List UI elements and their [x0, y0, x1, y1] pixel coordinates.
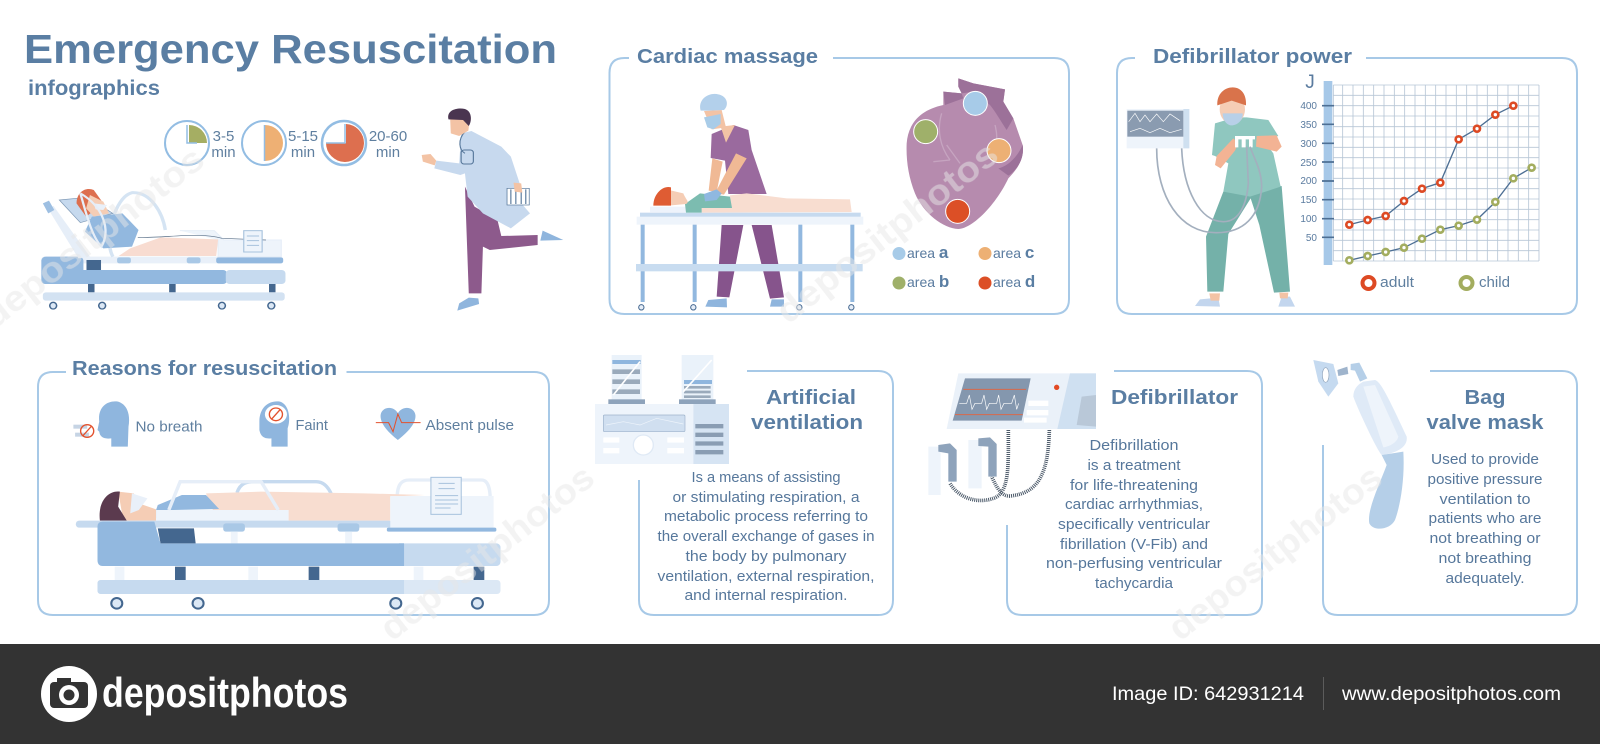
label: faint: Faint: [296, 417, 329, 434]
clock 3-5 min: min: [211, 144, 236, 161]
legend: heart areas: area b: [907, 272, 949, 291]
axis labels: 150: [1300, 195, 1317, 206]
grid: [1333, 85, 1539, 261]
description text: Used to provide: [1431, 451, 1539, 468]
description text: tachycardia: [1095, 575, 1174, 592]
description text: [1428, 451, 1542, 587]
watermarks: depositphotos: [372, 456, 602, 648]
website: www.depositphotos.com: [1341, 683, 1561, 705]
axis labels: 200: [1300, 176, 1317, 187]
description text: or stimulating respiration, a: [672, 489, 860, 506]
footer band: [0, 644, 1600, 744]
series: child: [1346, 165, 1535, 263]
axis labels: 50: [1306, 233, 1317, 244]
patient lying on table: [650, 187, 852, 213]
watermarks: depositphotos: [768, 133, 1006, 331]
description text: not breathing: [1438, 550, 1532, 567]
legend: heart areas: area d: [993, 272, 1035, 291]
description text: ventilation to: [1440, 491, 1530, 508]
subtitle: infographics: [28, 77, 160, 100]
icon: camera logo: [41, 666, 97, 722]
description text: cardiac arrhythmias,: [1065, 496, 1203, 513]
watermarks: depositphotos: [1160, 456, 1390, 648]
axis labels: [1300, 72, 1317, 244]
legend: adult and child: adult: [1380, 274, 1415, 291]
panel: artificial ventilation: [595, 355, 893, 615]
clock 3-5 min: 3-5: [213, 128, 234, 145]
heading: Artificial: [766, 386, 856, 409]
description text: [658, 469, 874, 604]
description text: specifically ventricular: [1058, 516, 1210, 533]
watermarks: [0, 133, 1390, 648]
panel: reasons for resuscitation: [38, 357, 549, 615]
clock 5-15 min: 5-15: [288, 128, 318, 145]
description text: is a treatment: [1088, 457, 1181, 474]
axis labels: 100: [1300, 214, 1317, 225]
illustration: patient on tilted hospital bed: [41, 189, 285, 309]
illustration: running doctor: [422, 109, 563, 311]
clock 20-60 min: min: [376, 144, 400, 161]
description text: positive pressure: [1428, 471, 1542, 488]
panel: cardiac massage: [610, 45, 1069, 314]
description text: Defibrillation: [1090, 437, 1178, 454]
heading: Bag: [1464, 386, 1506, 409]
illustration: patient lying on hospital bed: [76, 477, 500, 609]
illustration: nurse performing chest compressions: [636, 94, 863, 310]
illustration: ventilator machine: [595, 355, 729, 464]
legend: heart areas: area a: [907, 243, 949, 262]
label: no breath: No breath: [136, 418, 202, 436]
axis labels: 350: [1300, 120, 1317, 131]
description text: metabolic process referring to: [664, 508, 868, 525]
clock 20-60 min: [322, 121, 407, 165]
label: absent pulse: Absent pulse: [426, 417, 514, 434]
illustration: heart with compression areas: [907, 78, 1023, 229]
description text: not breathing or: [1430, 530, 1540, 547]
panel: defibrillator power: [1117, 45, 1577, 314]
clock 3-5 min: [165, 121, 236, 165]
description text: the body by pulmonary: [686, 548, 847, 565]
brand name: depositphotos: [102, 669, 348, 716]
clock 5-15 min: [242, 121, 318, 165]
axis labels: 400: [1300, 101, 1317, 112]
icon: faint head: [259, 401, 289, 447]
clocks: duration stages: [165, 121, 407, 165]
axis labels: J: [1305, 72, 1315, 93]
description text: adequately.: [1446, 570, 1524, 587]
description text: [1046, 437, 1222, 592]
legend: heart areas: [892, 243, 1035, 291]
icon: heart with flat pulse: [376, 408, 421, 440]
panel: defibrillator: [928, 371, 1262, 615]
description text: non-perfusing ventricular: [1046, 555, 1222, 572]
legend: heart areas: area c: [993, 243, 1034, 262]
description text: for life-threatening: [1070, 477, 1198, 494]
heading: [751, 386, 863, 434]
title: Emergency Resuscitation: [24, 26, 557, 72]
image id: Image ID: 642931214: [1112, 683, 1304, 705]
clock 5-15 min: min: [291, 144, 315, 161]
description text: ventilation, external respiration,: [658, 568, 874, 585]
description text: and internal respiration.: [684, 587, 848, 604]
clock 20-60 min: 20-60: [369, 128, 407, 145]
heading: ventilation: [751, 411, 863, 434]
heading: Cardiac massage: [637, 45, 818, 68]
heading: Defibrillator: [1111, 386, 1238, 409]
axis labels: 300: [1300, 139, 1317, 150]
line chart: energy by patient type: [1300, 72, 1539, 291]
heading: Reasons for resuscitation: [72, 357, 337, 380]
illustration: defibrillator device with paddles: [928, 373, 1096, 500]
heading: [1426, 386, 1544, 434]
illustration: bag valve mask device: [1313, 360, 1407, 529]
description text: fibrillation (V-Fib) and: [1060, 536, 1208, 553]
panel: bag valve mask: [1313, 360, 1577, 615]
axis labels: 250: [1300, 158, 1317, 169]
legend: adult and child: child: [1479, 274, 1510, 291]
icon: no breath head: [73, 401, 129, 447]
description text: Is a means of assisting: [692, 469, 840, 486]
description text: the overall exchange of gases in: [658, 528, 874, 545]
description text: patients who are: [1428, 510, 1542, 527]
heading: valve mask: [1426, 411, 1544, 434]
table: [636, 213, 863, 310]
legend: adult and child: [1362, 274, 1510, 291]
illustration: doctor holding paddles beside monitor: [1127, 87, 1295, 307]
heading: Defibrillator power: [1153, 45, 1352, 68]
series: adult: [1346, 103, 1516, 228]
